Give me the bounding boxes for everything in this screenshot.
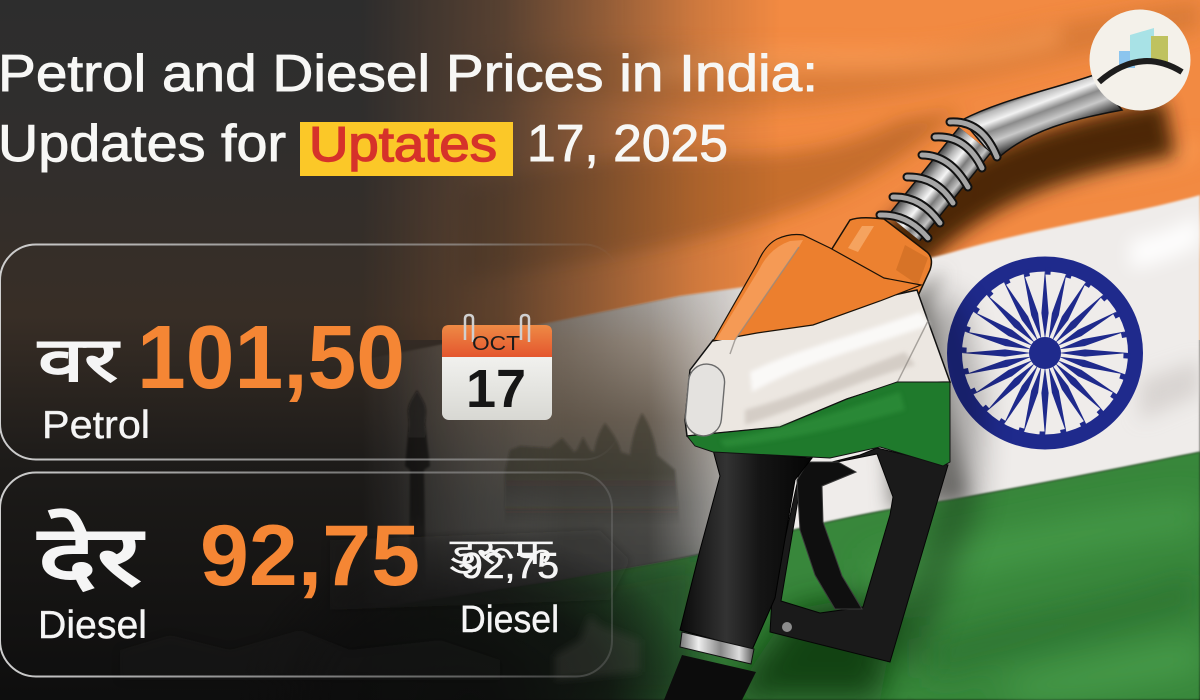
trigger <box>797 462 862 609</box>
spring coil <box>880 122 997 238</box>
coil rings <box>880 122 997 238</box>
icon: calendar <box>442 315 552 420</box>
flag white band <box>386 194 1200 576</box>
logo arc <box>1099 61 1182 82</box>
logo blue block <box>1119 51 1135 68</box>
diesel card outline <box>0 472 612 676</box>
petrol label: Petrol <box>42 404 150 447</box>
petrol card outline <box>0 244 620 460</box>
ashoka chakra <box>954 264 1136 442</box>
chakra spokes <box>961 269 1129 437</box>
chakra hub <box>1029 337 1061 369</box>
guard pin <box>782 622 792 632</box>
logo badge <box>1090 10 1190 110</box>
diesel price: 92,75 <box>200 508 420 604</box>
body saffron cap <box>713 234 921 341</box>
icon: calendar: OCT <box>472 333 520 355</box>
lower buildings <box>120 530 640 680</box>
front cap outline <box>730 247 928 420</box>
secondary price: 92,75 <box>461 545 559 586</box>
background: Indian flag <box>386 0 1200 700</box>
logo circle <box>1090 10 1190 110</box>
title line 2 start: Updates for <box>0 115 286 173</box>
garbled hindi text: डुरूफ <box>449 531 554 574</box>
flag white folds <box>880 215 1200 510</box>
trigger guard <box>770 448 948 662</box>
metal band <box>680 632 754 664</box>
domes <box>505 413 680 525</box>
hose pipe <box>962 75 1122 160</box>
yellow highlight with red word: Uptates <box>309 118 497 172</box>
flag green band <box>512 450 1200 700</box>
title <box>0 45 818 176</box>
flag green folds <box>540 500 1200 700</box>
panel: petrol <box>0 244 620 460</box>
logo teal block <box>1130 28 1154 62</box>
icon: calendar: 17 <box>466 359 526 419</box>
flag saffron band <box>392 0 1200 340</box>
coil core <box>904 140 975 228</box>
collar top <box>830 218 931 298</box>
body white fold shading <box>745 312 930 425</box>
flag saffron folds <box>460 0 1200 280</box>
logo green block <box>1151 36 1168 62</box>
panel: diesel <box>0 472 612 676</box>
nozzle body shadow <box>900 300 965 660</box>
petrol hindi label: वर <box>37 326 122 395</box>
title line 1: Petrol and Diesel Prices in India: <box>0 45 818 103</box>
title line 2 date: 17, 2025 <box>527 115 728 173</box>
body white band <box>685 290 950 436</box>
city skyline silhouette <box>120 390 680 680</box>
chakra rim <box>954 264 1136 442</box>
diesel hindi label: देर <box>35 508 145 603</box>
hazy mid tone over the white band left of the nozzle <box>507 290 736 583</box>
minaret <box>405 390 430 600</box>
icon: fuel nozzle <box>664 75 1122 700</box>
body green band <box>687 382 950 466</box>
grip <box>680 450 812 650</box>
diesel label: Diesel <box>38 604 147 647</box>
dark haze over lower left of flag <box>240 530 700 700</box>
sensor lens <box>684 363 726 437</box>
lower hose <box>664 655 756 700</box>
nozzle shadow on saffron <box>885 128 1170 265</box>
secondary diesel label: Diesel <box>460 599 559 641</box>
petrol price: 101,50 <box>137 308 405 408</box>
